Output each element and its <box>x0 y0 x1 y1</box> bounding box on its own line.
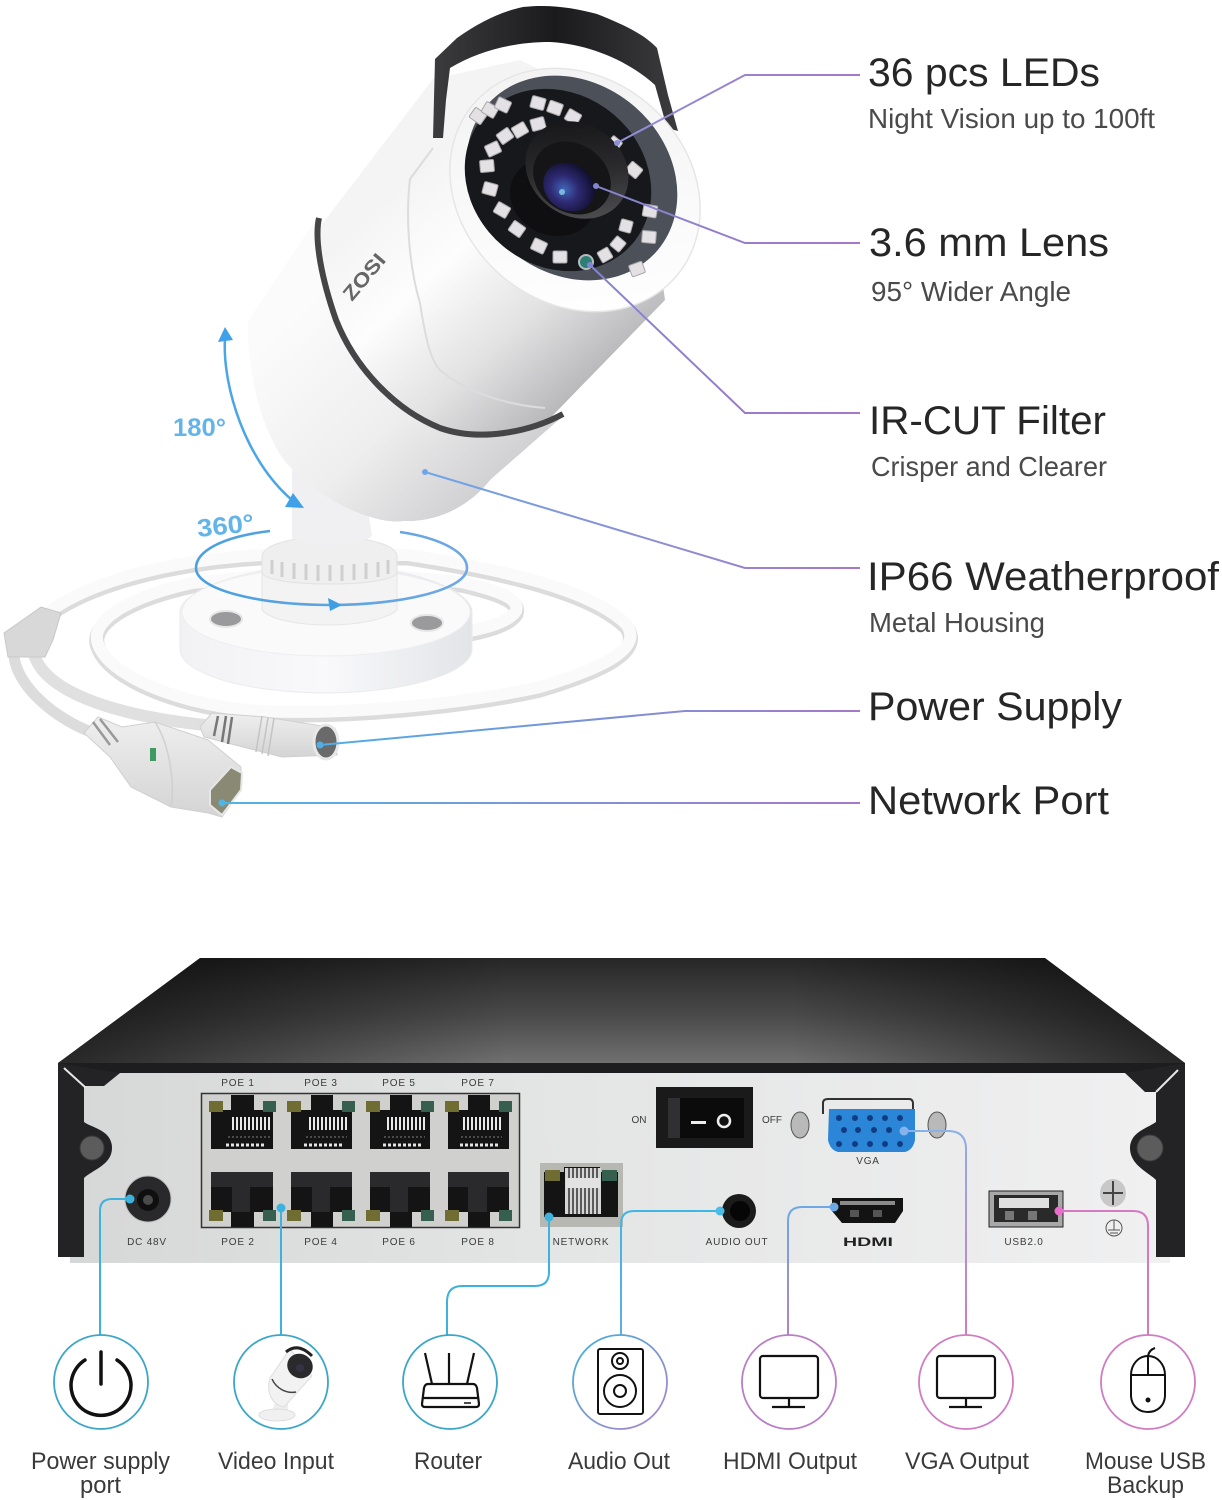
caption: video input: Video Input <box>218 1448 334 1475</box>
NVR port labels: OFF <box>762 1115 782 1126</box>
network connector <box>84 717 242 817</box>
tilt arrow 180 <box>218 327 304 508</box>
line: video <box>276 1204 286 1335</box>
POE lower ports <box>211 1172 509 1227</box>
icon: speaker <box>573 1335 667 1429</box>
NVR port labels: HDMI <box>843 1235 893 1249</box>
USB port <box>989 1191 1063 1227</box>
NVR port labels: USB2.0 <box>1004 1237 1044 1248</box>
NVR port labels: DC 48V <box>127 1237 167 1248</box>
NVR top surface <box>58 958 1185 1063</box>
HDMI port <box>832 1198 903 1223</box>
caption: HDMI output: HDMI Output <box>723 1448 857 1475</box>
label: 180 degrees: 180° <box>173 414 226 442</box>
NVR port labels: POE 4 <box>304 1237 338 1248</box>
NVR port labels: POE 5 <box>382 1078 416 1089</box>
line: VGA <box>900 1126 966 1335</box>
feature: lens: 95° Wider Angle <box>871 276 1071 307</box>
line: USB <box>1054 1206 1148 1335</box>
feature: LEDs: 36 pcs LEDs <box>868 51 1100 95</box>
NVR port labels: NETWORK <box>553 1237 609 1248</box>
callout: power line <box>316 711 860 748</box>
caption: router: Router <box>414 1448 482 1475</box>
NVR port labels: VGA <box>856 1156 880 1167</box>
POE contacts <box>232 1117 501 1130</box>
power switch <box>656 1087 753 1148</box>
icon captions <box>31 1448 1206 1499</box>
caption: VGA output: VGA Output <box>905 1448 1029 1475</box>
callout: housing line <box>422 469 860 568</box>
cable loops <box>14 555 630 730</box>
body shell seam <box>408 148 545 408</box>
POE contact traces <box>228 1136 502 1138</box>
POE port block <box>202 1094 520 1228</box>
feature: network port: Network Port <box>868 779 1109 823</box>
callout lines <box>218 75 860 806</box>
NVR port labels: POE 3 <box>304 1078 338 1089</box>
network port <box>540 1163 623 1227</box>
dark band <box>318 218 563 435</box>
NVR port labels: POE 6 <box>382 1237 416 1248</box>
power connector <box>200 713 338 759</box>
VGA port <box>823 1099 915 1152</box>
icon: power <box>54 1335 148 1429</box>
sun hood <box>433 6 678 138</box>
feature: power supply: Power Supply <box>868 685 1122 729</box>
panel: camera product <box>4 6 750 817</box>
POE lower port shading <box>211 1172 509 1212</box>
POE link LEDs <box>209 1101 512 1221</box>
caption: power supply port <box>31 1448 170 1499</box>
caption: power supply port: port <box>80 1472 121 1499</box>
icon: VGA monitor <box>919 1335 1013 1429</box>
caption: mouse USB backup <box>1085 1448 1206 1499</box>
callout: lens line <box>593 183 860 243</box>
NVR chassis frame <box>58 1063 1185 1257</box>
callout: network line <box>218 800 860 806</box>
NVR port labels: POE 7 <box>461 1078 495 1089</box>
line: power <box>100 1194 134 1335</box>
camera body <box>248 60 665 521</box>
feature: lens <box>869 221 1109 307</box>
feature: lens: 3.6 mm Lens <box>869 221 1109 265</box>
icon: mouse <box>1101 1335 1195 1429</box>
feature: LEDs: Night Vision up to 100ft <box>868 103 1155 134</box>
chassis screws <box>80 1135 1163 1161</box>
callout: LEDs line <box>614 75 860 146</box>
label: 360 degrees: 360° <box>196 509 255 543</box>
NVR port labels: AUDIO OUT <box>706 1237 768 1248</box>
feature: weatherproof: Metal Housing <box>869 607 1045 638</box>
lens assembly <box>400 18 750 362</box>
callout: IR-cut line <box>587 262 860 413</box>
panel: NVR recorder <box>58 958 1185 1263</box>
mounting screws <box>791 1112 946 1138</box>
brand name: ZOSI <box>339 250 391 305</box>
POE upper ports <box>211 1095 509 1149</box>
mount neck <box>292 470 372 545</box>
feature: weatherproof: IP66 Weatherproof <box>867 555 1220 599</box>
caption: mouse USB backup: Mouse USB <box>1085 1448 1206 1475</box>
NVR front plate <box>70 1070 1170 1263</box>
NVR port labels: POE 1 <box>221 1078 255 1089</box>
NVR port labels: POE 2 <box>221 1237 255 1248</box>
IR LED array <box>469 95 658 277</box>
cable splitter <box>4 607 61 657</box>
NVR port labels: ON <box>632 1115 646 1126</box>
ground terminal <box>1099 1178 1127 1236</box>
caption: power supply port: Power supply <box>31 1448 170 1475</box>
line: router <box>447 1212 554 1335</box>
icon row <box>54 1335 1195 1429</box>
icon: router <box>403 1335 497 1429</box>
feature: LEDs <box>868 51 1155 134</box>
mount base <box>180 537 472 693</box>
DC jack <box>125 1176 171 1222</box>
line: HDMI <box>788 1202 838 1335</box>
rotation arrow 360 <box>196 531 467 611</box>
feature: weatherproof <box>867 555 1220 638</box>
NVR port labels <box>127 1078 1044 1249</box>
icon: camera <box>234 1335 328 1429</box>
feature: IR-cut: IR-CUT Filter <box>869 399 1106 443</box>
icon: HDMI monitor <box>742 1335 836 1429</box>
NVR port labels: POE 8 <box>461 1237 495 1248</box>
feature: IR-cut: Crisper and Clearer <box>871 451 1107 482</box>
line: audio <box>621 1206 724 1335</box>
feature: IR-cut <box>869 399 1107 482</box>
connector lines <box>100 1126 1148 1335</box>
audio jack <box>722 1194 756 1228</box>
caption: audio out: Audio Out <box>568 1448 670 1475</box>
caption: mouse USB backup: Backup <box>1107 1472 1184 1499</box>
